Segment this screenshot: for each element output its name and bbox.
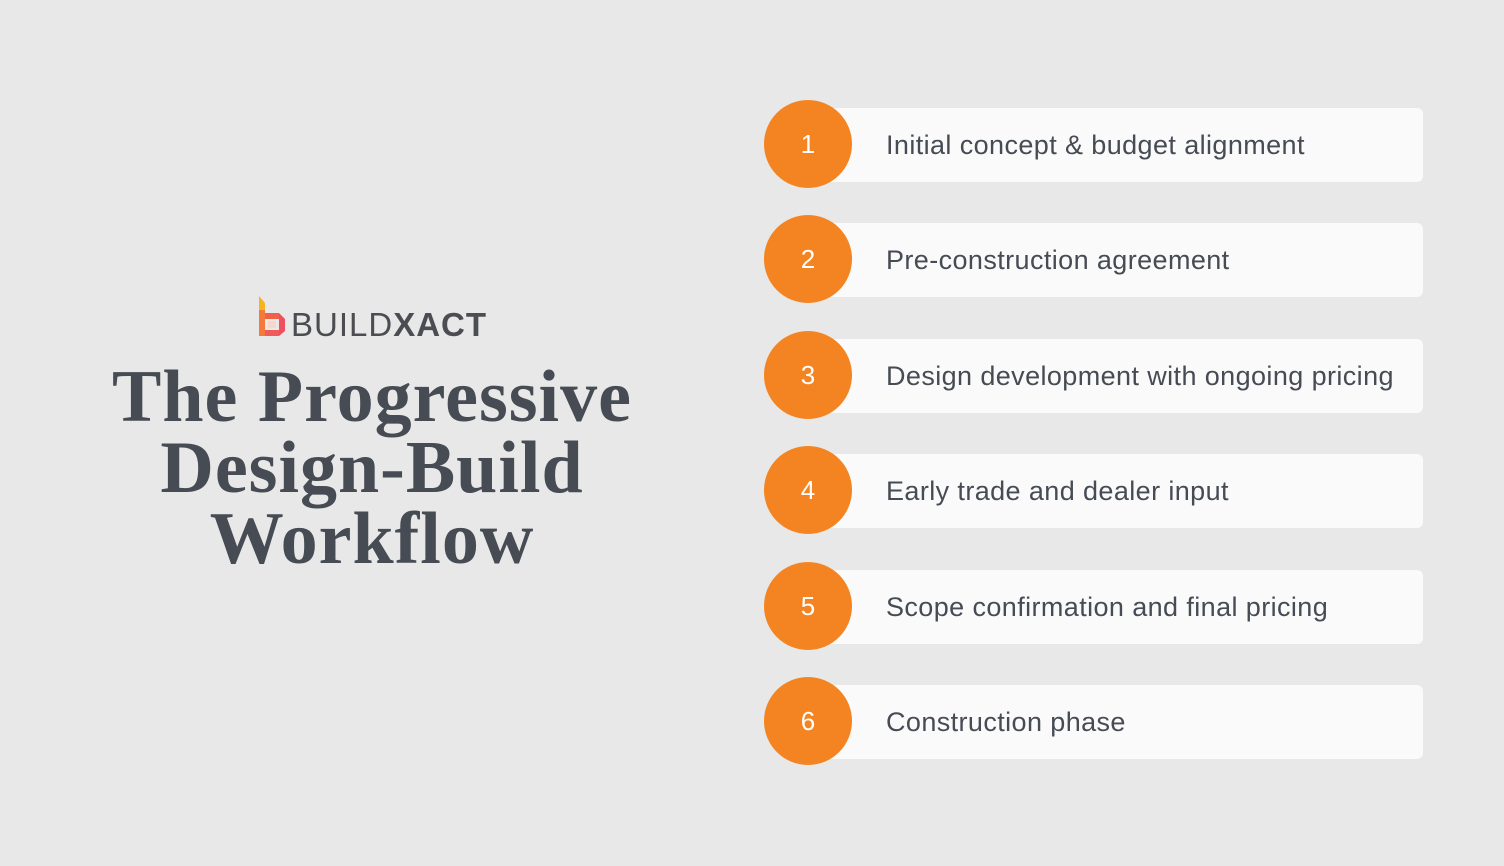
title: The Progressive (112, 356, 632, 438)
step 6: Construction phase (886, 707, 1126, 737)
step 2: 2 (801, 244, 815, 274)
title: Design-Build (160, 427, 584, 509)
step 2 (764, 215, 1423, 303)
step 5: 5 (801, 591, 815, 621)
step 5 (764, 562, 1423, 650)
step 6: 6 (801, 706, 815, 736)
logo (259, 296, 487, 340)
step 1: Initial concept & budget alignment (886, 130, 1305, 160)
step 3: Design development with ongoing pricing (886, 361, 1394, 391)
icon: logo mark (259, 296, 285, 336)
step 6 (764, 677, 1423, 765)
step 4: 4 (801, 475, 815, 505)
step 3 (764, 331, 1423, 419)
title: Workflow (210, 498, 534, 580)
step 4: Early trade and dealer input (886, 476, 1229, 506)
step 3: 3 (801, 360, 815, 390)
step 2: Pre-construction agreement (886, 245, 1230, 275)
step 1: 1 (801, 129, 815, 159)
step 1 (764, 100, 1423, 188)
step 5: Scope confirmation and final pricing (886, 592, 1328, 622)
step 4 (764, 446, 1423, 534)
title (112, 356, 632, 580)
